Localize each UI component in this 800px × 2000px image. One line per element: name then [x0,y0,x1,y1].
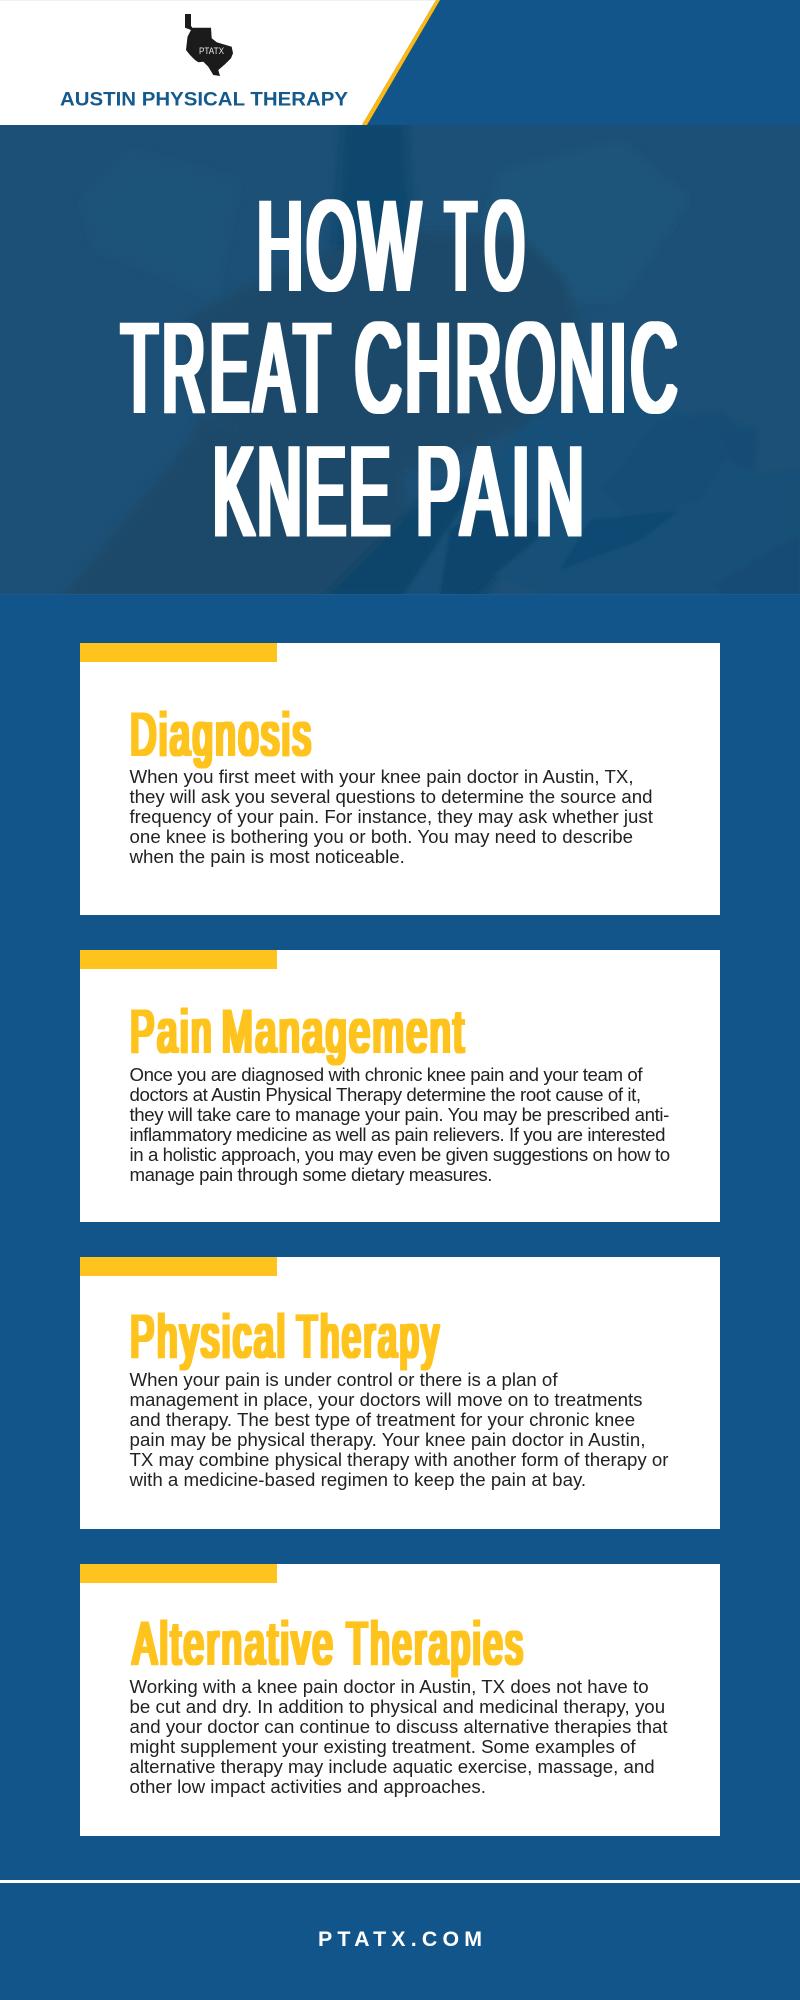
heading: physical therapy [130,1304,439,1371]
title: KNEE [213,421,390,564]
footer website: PTATX.COM [318,1927,482,1951]
text: alternative therapies body: be cut and dry. In addition to physical and medicinal therapy, you [130,1696,665,1717]
text: alternative therapies body: Working with a knee pain doctor in Austin, TX does not have to [130,1676,649,1697]
title: TREAT [121,298,330,440]
text: physical therapy body: When your pain is under control or there is a plan of [130,1369,558,1390]
title [121,174,677,564]
text: physical therapy body: management in place, your doctors will move on to treatments [130,1389,642,1410]
heading: alternative therapies [133,1611,523,1678]
header band with logo [0,0,800,125]
panel: physical therapy [80,1257,720,1529]
heading: alternative therapies: Therapies [347,1611,523,1678]
heading: diagnosis: Diagnosis [130,702,311,768]
title: TO [445,174,524,318]
heading: physical therapy: Physical [130,1304,285,1370]
text: diagnosis body: frequency of your pain. For instance, they may ask whether just [130,806,654,827]
text: pain management body: inflammatory medicine as well as pain relievers. If you are interested [130,1124,666,1145]
text: pain management body: doctors at Austin Physical Therapy determine the root cause of it, [130,1084,641,1105]
text: alternative therapies body: and your doctor can continue to discuss alternative therapies that [130,1716,668,1737]
text: diagnosis body: When you first meet with your knee pain doctor in Austin, TX, [130,766,634,787]
title: CHRONIC [355,297,677,440]
text: pain management body: manage pain through some dietary measures. [130,1164,492,1185]
heading: pain management: Management [222,998,464,1065]
text: alternative therapies body: other low impact activities and approaches. [130,1776,486,1797]
logo wordmark: AUSTIN PHYSICAL THERAPY [60,89,348,111]
text: diagnosis body: they will ask you several questions to determine the source and [130,786,652,807]
text: physical therapy body [128,1369,668,1490]
icon: Texas state logo [185,14,233,76]
panel: pain management [80,950,720,1222]
text: diagnosis body: when the pain is most noticeable. [128,846,405,867]
text: pain management body: in a holistic approach, you may even be given suggestions on how to [130,1144,670,1165]
panel: alternative therapies [80,1564,720,1836]
title: PAIN [416,420,584,563]
icon: Texas state logo: PTATX [199,46,225,57]
text: alternative therapies body: alternative therapy may include aquatic exercise, massage, and [130,1756,655,1777]
heading: physical therapy: Therapy [297,1304,439,1371]
text: physical therapy body: and therapy. The best type of treatment for your chronic knee [130,1409,635,1430]
text: pain management body: they will take care to manage your pain. You may be prescribed anti- [130,1104,669,1125]
text: alternative therapies body: might supplement your existing treatment. Some examples of [130,1736,636,1757]
text: diagnosis body [128,766,654,867]
heading: pain management: Pain [130,999,211,1065]
text: alternative therapies body [130,1676,668,1797]
hero photo background [0,120,800,600]
text: physical therapy body: TX may combine physical therapy with another form of therapy or [130,1449,668,1470]
heading: alternative therapies: Alternative [133,1611,333,1677]
text: diagnosis body: one knee is bothering you or both. You may need to describe [130,826,633,847]
text: physical therapy body: with a medicine-based regimen to keep the pain at bay. [128,1469,586,1490]
text: pain management body [130,1064,670,1185]
text: pain management body: Once you are diagnosed with chronic knee pain and your team of [130,1064,643,1085]
title: HOW [257,175,420,318]
panel: diagnosis [80,643,720,915]
text: physical therapy body: pain may be physical therapy. Your knee pain doctor in Austin, [130,1429,646,1450]
